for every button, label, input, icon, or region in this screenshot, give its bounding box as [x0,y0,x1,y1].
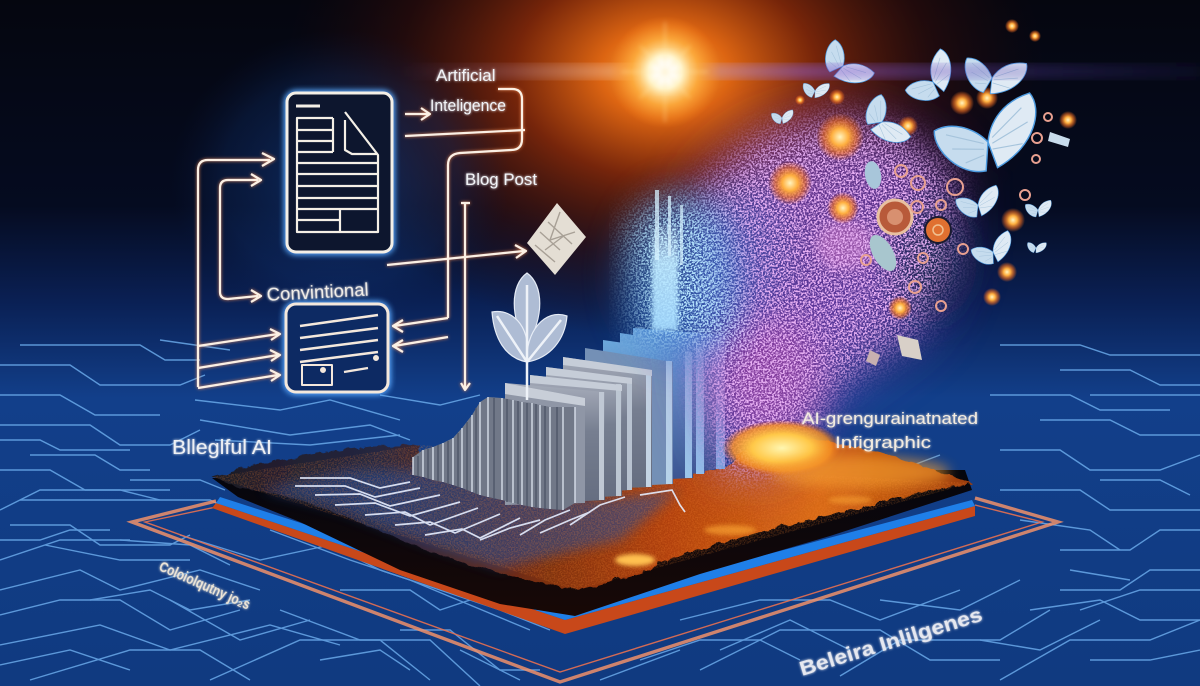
lava glow [722,420,950,488]
front vertical fins [413,397,575,510]
label: floor right: Beleira Inlilgenes [797,604,985,681]
outer red frame [132,498,1058,682]
label: Conventional: Convintional [266,280,369,305]
card icon [286,304,388,392]
sun [400,16,1200,128]
label: floor left: Coloiolqutny jo₂s [156,558,253,614]
label: Blleglful AI: Blleglful AI [172,437,272,459]
circuit traces on terrain [295,478,685,540]
label: Artificial: Artificial [436,66,496,85]
plant icon [492,273,567,400]
diamond chip [527,203,586,275]
butterflies [770,31,1052,275]
document icon [287,93,392,252]
label: Infographic: Infigraphic [835,433,932,452]
blue light column [620,190,740,360]
flow arrows [198,89,526,390]
terrain block [212,438,972,616]
label: Blog Post: Blog Post [465,170,537,189]
label: AI-generated: AI-grengurainatnated [802,409,978,428]
platform layers [212,497,975,634]
metal slabs staircase [505,328,725,505]
particle cloud [690,120,965,480]
glowing orbs and rings [768,19,1077,366]
label: Intelligence: Inteligence [430,96,506,115]
circuit board floor [0,340,1200,686]
